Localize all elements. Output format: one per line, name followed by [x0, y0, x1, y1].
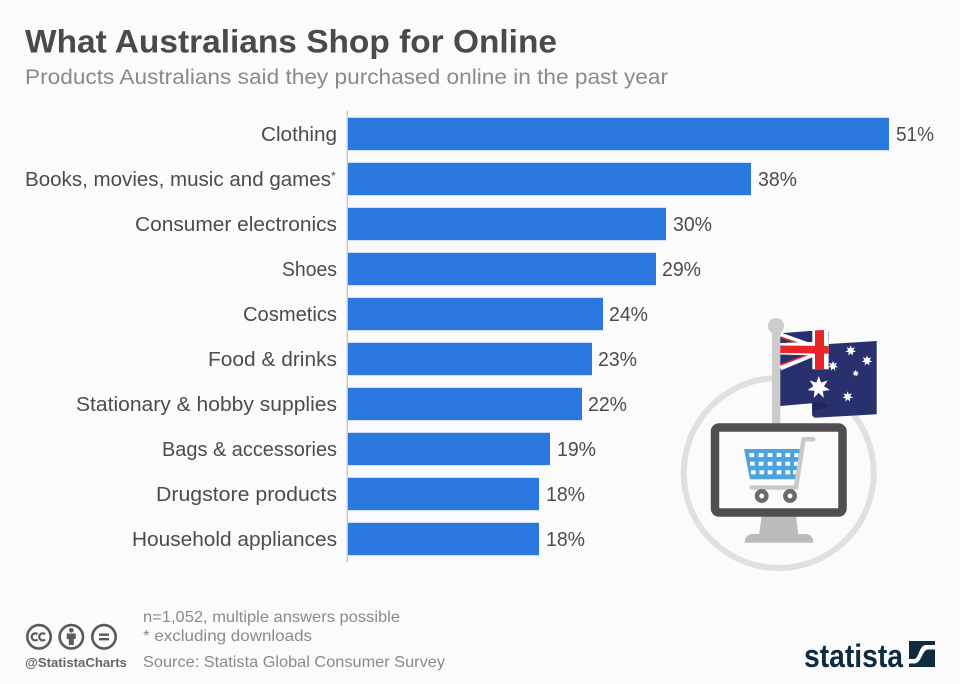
bar: Shoes: 29% — [662, 258, 701, 281]
bar: Drugstore products — [156, 478, 585, 510]
bar: Stationary & hobby supplies — [76, 388, 627, 420]
bar: Bags & accessories: Bags & accessories — [162, 438, 337, 461]
bar: Cosmetics — [243, 298, 648, 330]
bar: Food & drinks: Food & drinks — [208, 348, 337, 371]
subtitle: Products Australians said they purchased online in the past year — [25, 65, 668, 89]
bar: Stationary & hobby supplies: 22% — [588, 393, 627, 416]
bar: Bags & accessories — [162, 433, 596, 465]
bar: Books, movies, music and games — [25, 163, 797, 195]
icon: Australian flag — [780, 330, 877, 418]
source: Source: Statista Global Consumer Survey — [143, 654, 445, 671]
bar chart — [25, 118, 934, 555]
statista logo: statista — [804, 638, 903, 674]
bar: Drugstore products: Drugstore products — [156, 483, 337, 506]
bar: Clothing: Clothing — [261, 123, 337, 146]
bar: Cosmetics: Cosmetics — [243, 303, 337, 326]
icon: monitor with shopping cart and Australian flag — [684, 318, 877, 568]
icon: flag pole — [768, 318, 784, 424]
bar: Books, movies, music and games: Books, movies, music and games — [25, 168, 331, 191]
bar: Consumer electronics: 30% — [673, 213, 712, 236]
title: What Australians Shop for Online — [25, 24, 557, 60]
bar: Stationary & hobby supplies: Stationary & hobby supplies — [76, 393, 337, 416]
bar: Clothing: 51% — [896, 123, 934, 146]
note: excluding downloads: * excluding downloads — [143, 628, 312, 645]
bar: Books, movies, music and games: 38% — [758, 168, 797, 191]
bar: Shoes: Shoes — [282, 258, 337, 281]
bar: Household appliances: 18% — [546, 528, 585, 551]
icon: shopping cart — [744, 439, 813, 501]
bar: Books, movies, music and games: * — [331, 169, 336, 183]
bar: Consumer electronics: Consumer electronics — [135, 213, 337, 236]
bar: Cosmetics: 24% — [609, 303, 648, 326]
bar: Drugstore products: 18% — [546, 483, 585, 506]
bar: Household appliances: Household appliances — [132, 528, 337, 551]
bar: Food & drinks — [208, 343, 637, 375]
note: sample size: n=1,052, multiple answers possible — [143, 609, 400, 626]
icon: creative commons licence — [27, 625, 116, 648]
icon: monitor — [715, 428, 842, 543]
bar: Consumer electronics — [135, 208, 712, 240]
bar: Household appliances — [132, 523, 585, 555]
bar: Shoes — [282, 253, 701, 285]
bar: Bags & accessories: 19% — [557, 438, 596, 461]
credit handle: @StatistaCharts — [25, 656, 127, 670]
bar: Food & drinks: 23% — [598, 348, 637, 371]
bar: Clothing — [261, 118, 934, 150]
